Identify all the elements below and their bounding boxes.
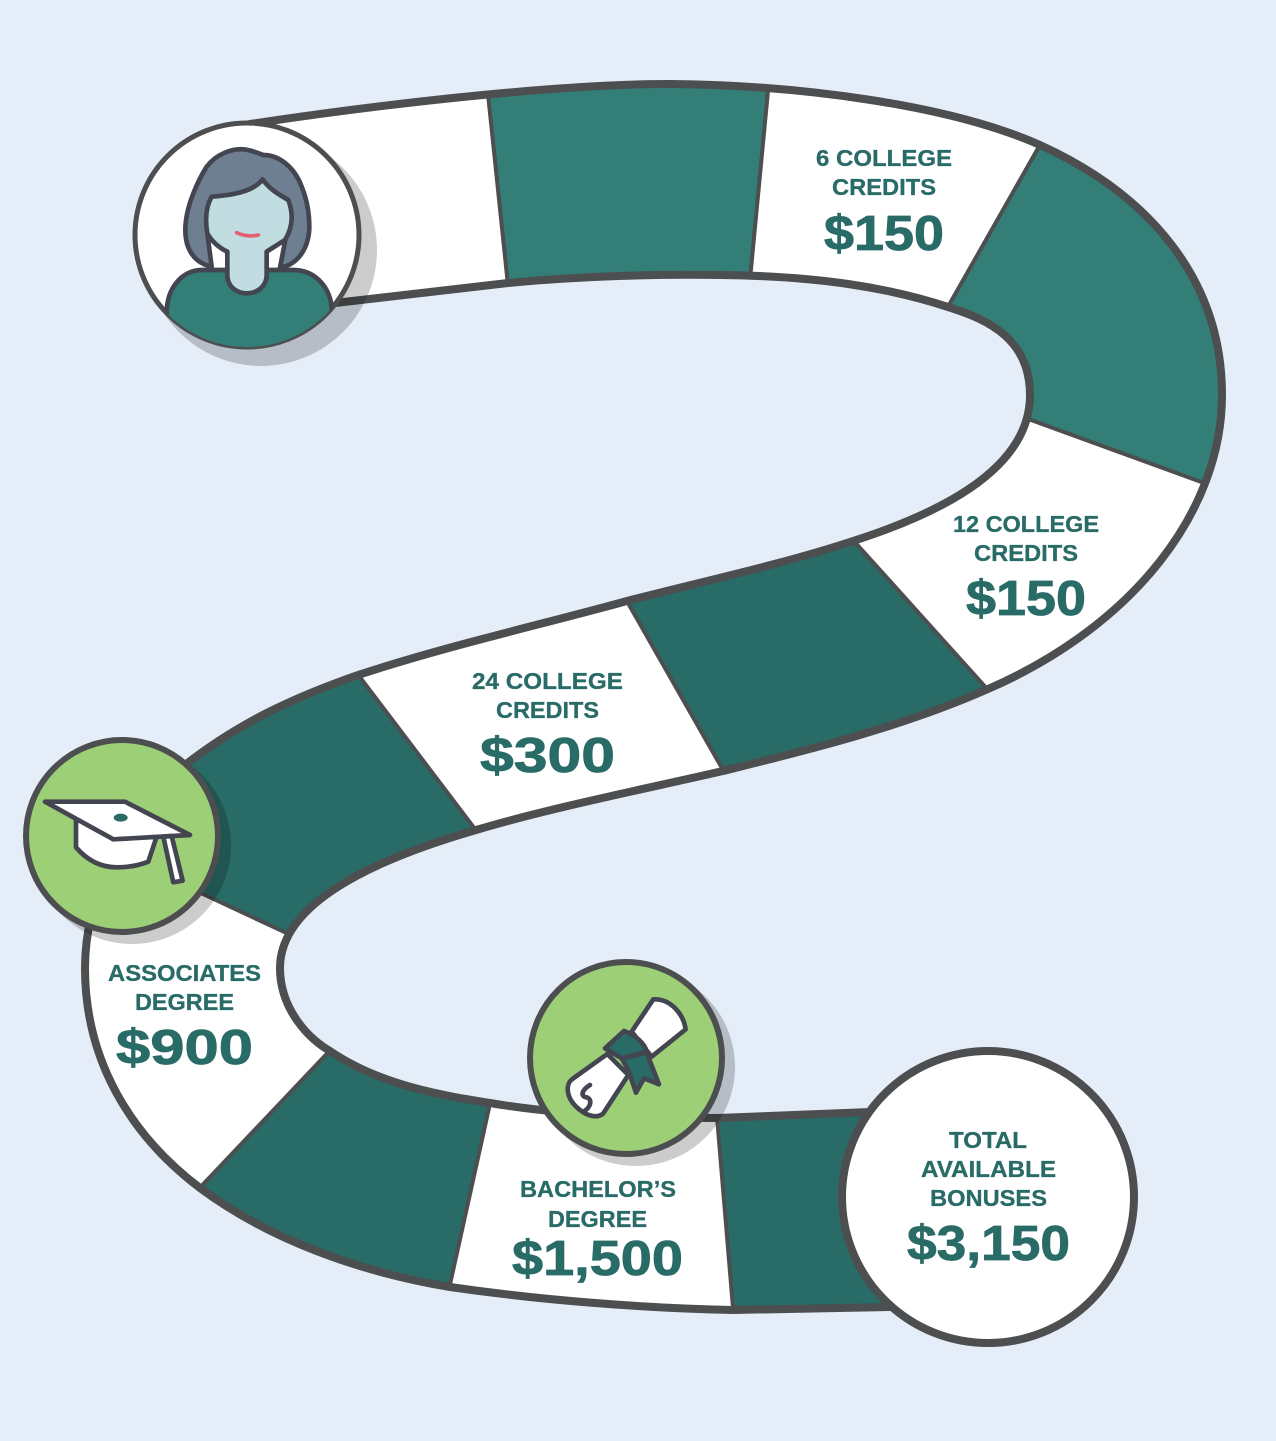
label: 6 college credits <box>816 145 952 261</box>
label: 12 college credits: $150 <box>966 572 1086 626</box>
icon: graduation cap badge <box>26 740 231 944</box>
label: bachelor's degree: DEGREE <box>548 1206 647 1232</box>
label: bachelor's degree: BACHELOR’S <box>520 1176 676 1202</box>
label: 12 college credits <box>953 511 1099 626</box>
panel: total available bonuses <box>842 1051 1134 1343</box>
panel: total available bonuses: $3,150 <box>907 1217 1070 1271</box>
panel: total available bonuses: BONUSES <box>930 1185 1047 1211</box>
label: 6 college credits: $150 <box>824 207 944 261</box>
icon: diploma badge <box>530 962 735 1166</box>
label: associates degree: $900 <box>116 1021 253 1075</box>
label: 24 college credits <box>472 668 623 783</box>
label: 12 college credits: CREDITS <box>974 540 1078 566</box>
label: 12 college credits: 12 COLLEGE <box>953 511 1099 537</box>
label: 6 college credits: CREDITS <box>832 174 936 200</box>
label: 6 college credits: 6 COLLEGE <box>816 145 952 171</box>
label: bachelor's degree <box>512 1176 683 1286</box>
panel: total available bonuses: AVAILABLE <box>921 1156 1056 1182</box>
label: 24 college credits: 24 COLLEGE <box>472 668 623 694</box>
panel: total available bonuses: TOTAL <box>949 1127 1027 1153</box>
label: bachelor's degree: $1,500 <box>512 1232 683 1286</box>
label: associates degree <box>108 960 261 1075</box>
label: 24 college credits: $300 <box>480 729 615 783</box>
label: 24 college credits: CREDITS <box>496 697 599 723</box>
label: associates degree: DEGREE <box>135 989 234 1015</box>
icon: person avatar <box>135 123 377 366</box>
label: associates degree: ASSOCIATES <box>108 960 261 986</box>
